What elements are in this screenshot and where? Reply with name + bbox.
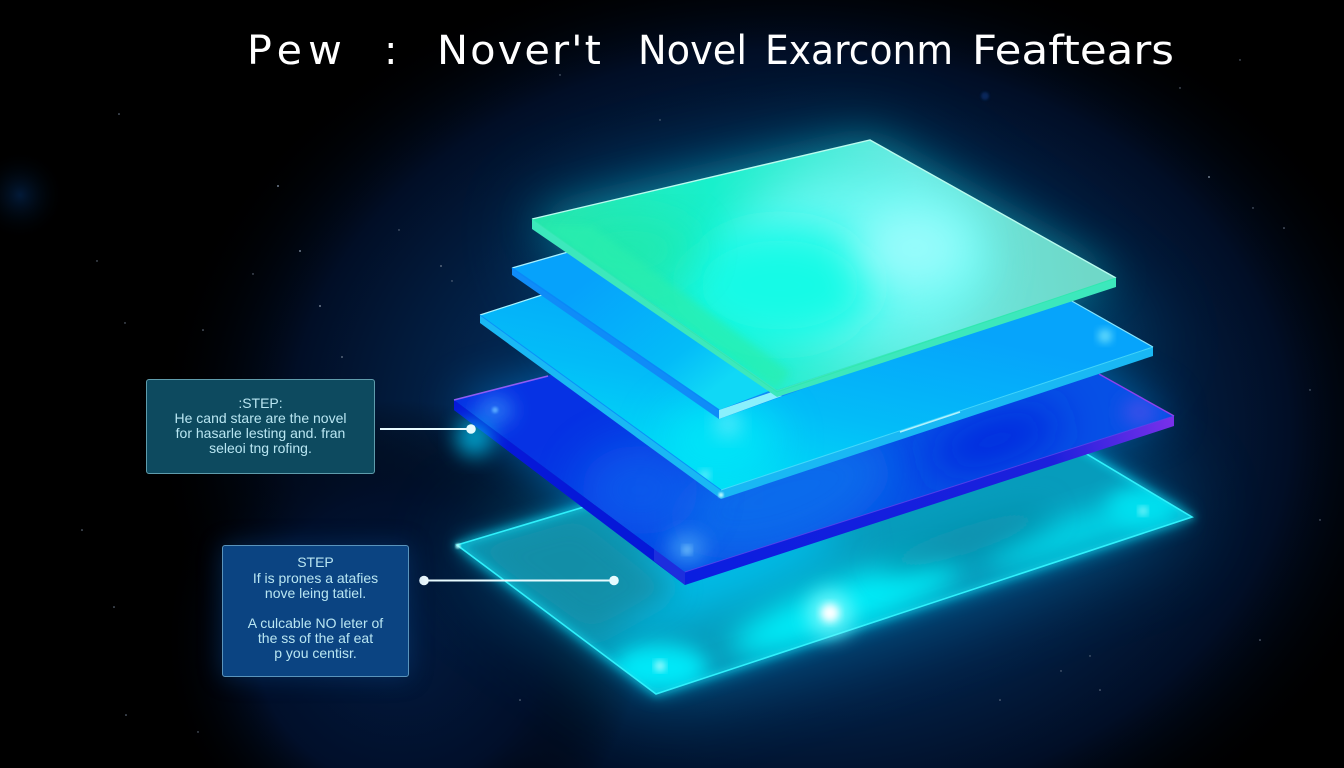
card 2 body line 1: If is prones a atafies bbox=[253, 570, 378, 586]
leader line 2 bbox=[419, 576, 619, 585]
callout card: step 2 bbox=[222, 545, 409, 677]
title bbox=[247, 28, 1174, 74]
title: : bbox=[384, 28, 397, 74]
title: Exarconm bbox=[765, 28, 953, 74]
title: Feaftears bbox=[972, 28, 1174, 74]
card 2 body line 3: A culcable NO leter of bbox=[248, 615, 383, 631]
card 2 body line 4: the ss of the af eat bbox=[258, 630, 373, 646]
card 2 heading: STEP bbox=[297, 554, 334, 570]
title: Pew bbox=[247, 28, 348, 74]
stack outer glow bbox=[454, 140, 1192, 694]
leader 1 dot glow on blue plate bbox=[456, 420, 492, 456]
layer 5: glowing translucent base plate bbox=[448, 447, 1200, 705]
title: Novel bbox=[638, 28, 747, 74]
card 2 body line 5: p you centisr. bbox=[274, 645, 357, 661]
card 1 body line 3: seleoi tng rofing. bbox=[209, 440, 312, 456]
layer 4: blue plate bbox=[454, 374, 1174, 585]
card 1 heading: :STEP: bbox=[238, 395, 283, 411]
card 1 body line 2: for hasarle lesting and. fran bbox=[176, 425, 345, 441]
card 1 body line 1: He cand stare are the novel bbox=[174, 410, 346, 426]
leader line 1 bbox=[380, 424, 476, 434]
title: Nover't bbox=[437, 28, 603, 74]
layer 3: light-blue plate bbox=[480, 294, 1154, 499]
card 2 body line 2: nove leing tatiel. bbox=[265, 585, 366, 601]
layer 2: upper blue plate bbox=[512, 236, 850, 419]
layer 1: top mint-green plate bbox=[532, 140, 1116, 397]
callout card: step 1 bbox=[146, 379, 375, 474]
